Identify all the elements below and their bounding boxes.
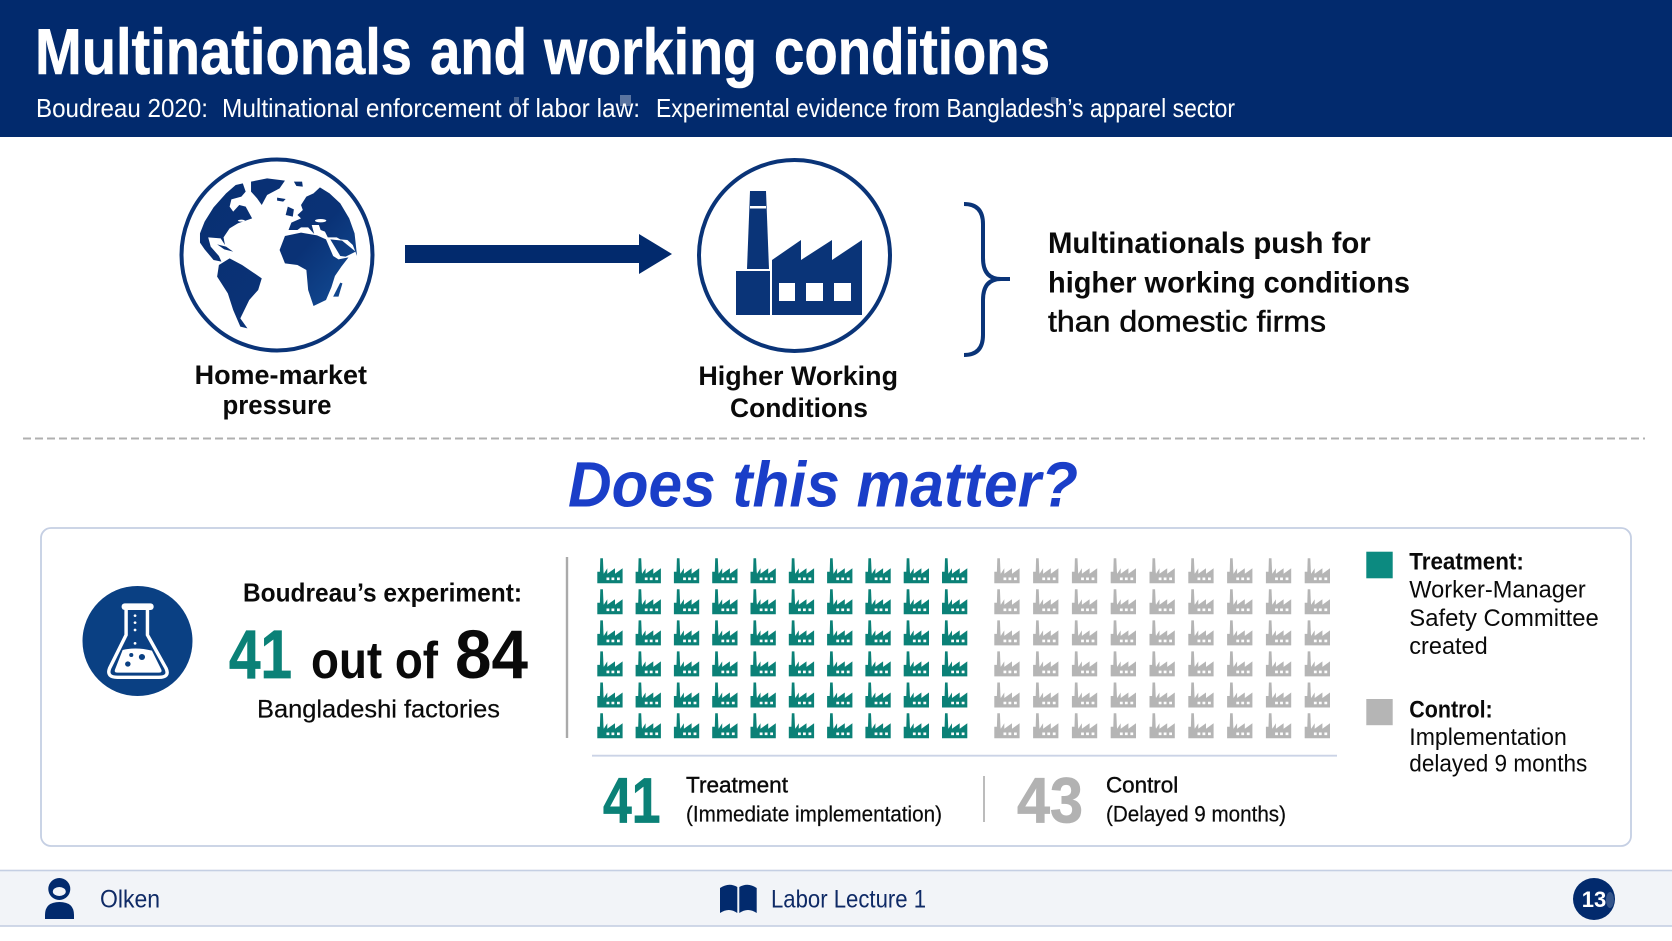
icon grid: control factories xyxy=(994,558,1330,738)
takeaway text: Multinationals push for xyxy=(1048,227,1371,260)
title: conditions xyxy=(774,15,1050,88)
legend: treatment xyxy=(1366,548,1599,660)
icon grid: treatment factories xyxy=(597,558,967,738)
experiment heading: Boudreau’s experiment: xyxy=(243,578,522,608)
footer: lecture: Labor Lecture 1 xyxy=(771,886,926,914)
subtitle: Boudreau 2020: xyxy=(36,93,208,123)
legend: control: Control: xyxy=(1409,696,1493,723)
panel: experiment xyxy=(41,528,1631,846)
subtitle: Multinational enforcement of labor law: xyxy=(222,93,640,123)
takeaway text: higher working conditions xyxy=(1048,267,1410,300)
title xyxy=(35,15,1050,88)
count: control: 43 xyxy=(1017,765,1083,837)
stat: 41 out of 84 xyxy=(229,616,528,693)
header banner xyxy=(0,0,1672,137)
count: control xyxy=(1017,765,1286,837)
title: and xyxy=(430,15,527,88)
count: treatment: (Immediate implementation) xyxy=(686,802,942,827)
heading: does this matter: Does this matter? xyxy=(568,448,1078,520)
legend: treatment: created xyxy=(1409,633,1488,660)
count: treatment: 41 xyxy=(603,765,660,837)
stat: 41 out of 84: 41 xyxy=(229,616,292,693)
label: higher working conditions xyxy=(698,361,898,423)
arrow xyxy=(405,234,672,274)
subtitle xyxy=(36,93,1235,123)
page number: 13 xyxy=(1582,887,1606,912)
stat: 41 out of 84: out of xyxy=(311,632,439,690)
legend: treatment: Worker-Manager xyxy=(1409,577,1586,604)
legend: control: delayed 9 months xyxy=(1409,751,1587,778)
title: Multinationals xyxy=(35,15,412,88)
stat: 41 out of 84: 84 xyxy=(455,616,528,693)
label: higher working conditions: Conditions xyxy=(730,393,868,423)
icon: factory xyxy=(699,160,890,351)
stat caption: Bangladeshi factories xyxy=(257,696,500,724)
count: control: (Delayed 9 months) xyxy=(1106,802,1286,827)
subtitle: Experimental evidence from Bangladesh’s apparel sector xyxy=(656,93,1235,123)
legend: treatment: Safety Committee xyxy=(1409,605,1599,632)
label: home-market pressure: pressure xyxy=(222,390,332,420)
count: treatment xyxy=(603,765,942,837)
label: home-market pressure: Home-market xyxy=(195,360,367,390)
takeaway text: than domestic firms xyxy=(1048,306,1326,339)
takeaway text xyxy=(1048,227,1410,339)
brace xyxy=(964,204,1010,355)
page number xyxy=(1573,878,1615,920)
icon: flask xyxy=(82,586,192,696)
legend: control xyxy=(1366,696,1587,778)
label: higher working conditions: Higher Working xyxy=(698,361,898,391)
legend: control: Implementation xyxy=(1409,724,1567,751)
icon: globe xyxy=(182,160,372,350)
title: working xyxy=(543,15,757,88)
count: control: Control xyxy=(1106,773,1178,798)
legend: treatment: Treatment: xyxy=(1409,548,1524,575)
label: home-market pressure xyxy=(195,360,367,420)
footer: author: Olken xyxy=(100,886,160,914)
icon: person xyxy=(45,878,74,919)
count: treatment: Treatment xyxy=(686,773,788,798)
footer bar xyxy=(0,870,1672,926)
icon: book xyxy=(720,885,757,913)
